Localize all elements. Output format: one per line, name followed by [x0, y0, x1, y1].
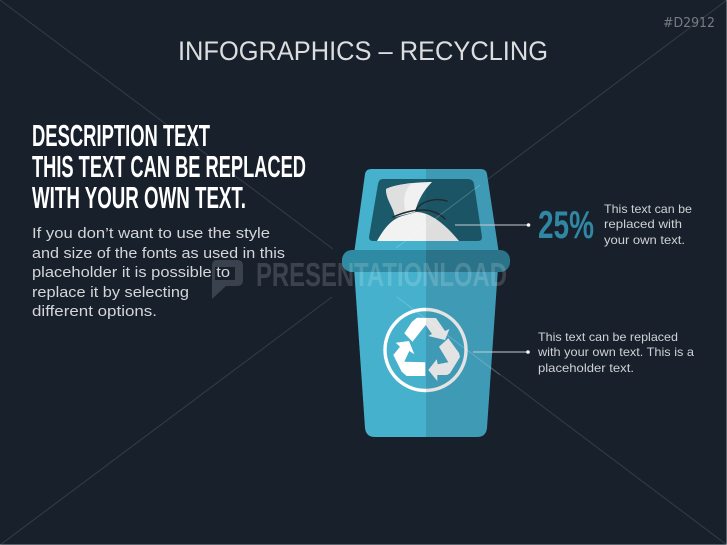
bag body: [377, 212, 459, 241]
callout text: 25%: your own text.: [604, 233, 685, 247]
document code: #D2912: [663, 16, 715, 31]
bag flap shadow: [386, 183, 412, 217]
stat: 25%: 25%: [538, 204, 594, 247]
callout text: 25%: replaced with: [604, 217, 682, 231]
body text block: replace it by selecting: [32, 284, 189, 301]
bin body: [354, 268, 498, 437]
recycling icon: [385, 310, 466, 390]
heading: description text: DESCRIPTION TEXT: [32, 118, 210, 153]
callout text: 25%: [604, 202, 692, 247]
watermark wordmark: PRESENTATIONLOAD: [256, 256, 507, 293]
body text block: different options.: [32, 303, 157, 320]
connector: bag callout: [455, 223, 530, 227]
bag top flap: [386, 182, 432, 217]
body text block: If you don’t want to use the style: [32, 225, 270, 242]
callout text: recycling: This text can be replaced: [538, 330, 678, 344]
body text block: [32, 225, 285, 320]
callout text: recycling: placeholder text.: [538, 361, 634, 375]
connector: recycling icon callout: [473, 350, 530, 354]
title: INFOGRAPHICS – RECYCLING: [178, 36, 548, 66]
heading: description text: [32, 118, 306, 215]
callout text: recycling: [537, 330, 694, 375]
bin opening: [369, 179, 482, 241]
body text block: placeholder it is possible to: [32, 264, 230, 281]
watermark logo: [212, 260, 243, 299]
garbage bag: [377, 182, 459, 241]
heading: description text: WITH YOUR OWN TEXT.: [32, 180, 246, 215]
body text block: and size of the fonts as used in this: [32, 245, 285, 262]
bin lid rim: [342, 250, 510, 272]
recycling bin: [342, 169, 510, 437]
heading: description text: THIS TEXT CAN BE REPLACED: [32, 149, 306, 184]
callout text: recycling: with your own text. This is a: [537, 345, 694, 359]
bin upper lid frame: [354, 169, 499, 254]
bag ties: [393, 200, 447, 219]
callout text: 25%: This text can be: [604, 202, 692, 216]
